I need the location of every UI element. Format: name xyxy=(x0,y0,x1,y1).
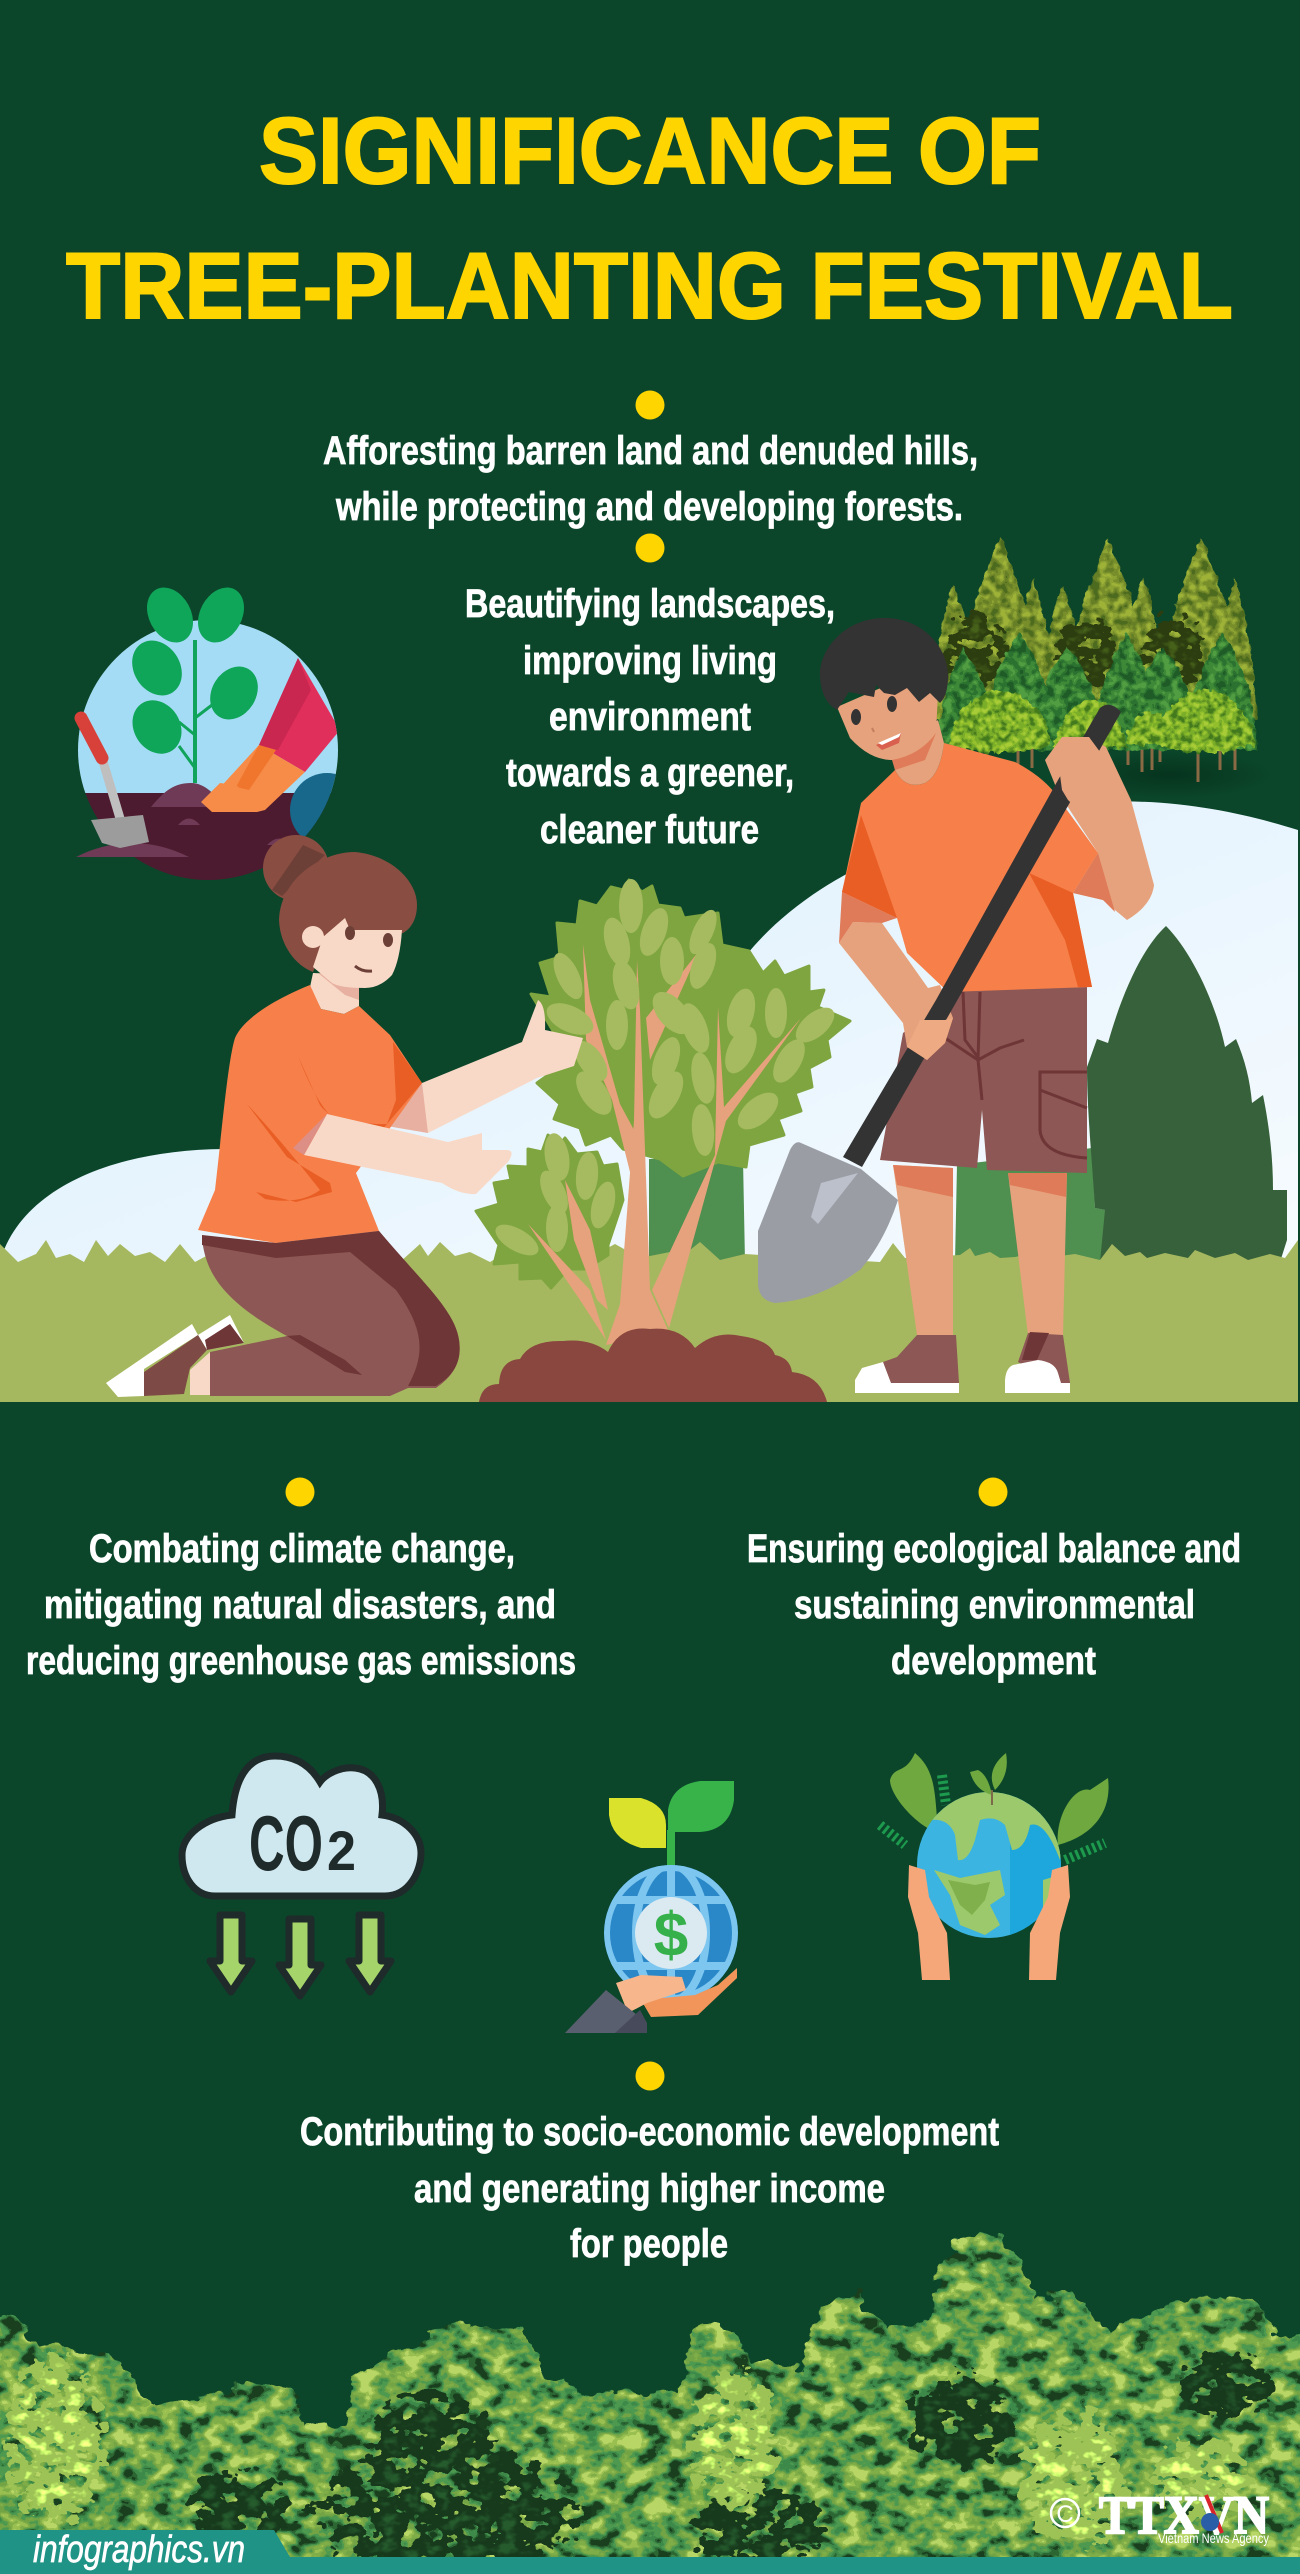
shoes xyxy=(883,1335,959,1383)
icon: CO2 cloud with down arrows: 2 xyxy=(327,1819,356,1882)
text block: beautifying landscapes: environment xyxy=(549,695,751,739)
legs xyxy=(893,1165,953,1335)
panel: background hills xyxy=(0,801,1298,1300)
icon: CO2 cloud with down arrows: CO xyxy=(249,1799,323,1887)
shovel handle xyxy=(843,705,1121,1167)
shorts xyxy=(880,985,1087,1173)
icon: globe with dollar and sprout: $ xyxy=(654,1901,688,1970)
text block: beautifying landscapes: Beautifying landscapes, xyxy=(465,582,835,626)
logo: TTXVN: TTXVN xyxy=(1099,2485,1269,2545)
text block: ensuring ecological balance: development xyxy=(891,1639,1096,1683)
right arm xyxy=(1045,737,1154,920)
text block: afforesting: Afforesting barren land and denuded hills, xyxy=(323,429,978,473)
pants xyxy=(202,1231,460,1396)
logo: TTXVN: Vietnam News Agency xyxy=(1158,2530,1269,2546)
shovel blade xyxy=(758,1142,898,1303)
logo: TTXVN: C xyxy=(1056,2501,1074,2528)
illustration: planted tree xyxy=(476,879,850,1402)
text block: afforesting xyxy=(323,390,978,529)
light leaves xyxy=(491,879,840,1262)
shirt xyxy=(198,985,422,1243)
illustration: boy with shovel xyxy=(758,618,1154,1393)
text block: combating climate change: reducing greenhouse gas emissions xyxy=(26,1639,576,1683)
bun and hair xyxy=(263,835,329,901)
panel: grass ground xyxy=(0,1240,1298,1402)
footer band with site name: infographics.vn xyxy=(33,2529,245,2571)
title: TREE-PLANTING FESTIVAL xyxy=(66,233,1233,338)
hands xyxy=(1058,737,1118,823)
text block: socio-economic development: for people xyxy=(570,2222,728,2266)
shirt xyxy=(842,743,1098,992)
icon: forest of trees xyxy=(933,538,1275,799)
leaf over woman's hand xyxy=(542,997,598,1041)
text block: ensuring ecological balance xyxy=(747,1478,1241,1683)
icon: CO2 cloud with down arrows xyxy=(182,1756,421,1996)
text block: beautifying landscapes: towards a greener, xyxy=(506,751,794,795)
icon: hand planting sapling xyxy=(74,588,338,880)
icon: globe with dollar and sprout xyxy=(565,1781,740,2033)
far arm xyxy=(387,1000,583,1133)
text block: beautifying landscapes: improving living xyxy=(523,639,777,683)
neck and head xyxy=(892,720,944,785)
face and neck xyxy=(310,973,359,1014)
text block: beautifying landscapes: cleaner future xyxy=(540,808,759,852)
illustration: kneeling woman xyxy=(106,835,583,1397)
text block: socio-economic development xyxy=(300,2062,999,2266)
illustration: foliage treeline xyxy=(0,2233,1300,2574)
trunk and branches xyxy=(528,944,801,1345)
soil mound xyxy=(479,1328,827,1402)
text block: combating climate change xyxy=(26,1478,576,1683)
text block: socio-economic development: and generating higher income xyxy=(414,2167,885,2211)
text block: ensuring ecological balance: sustaining environmental xyxy=(794,1583,1195,1627)
shoes xyxy=(198,1315,244,1350)
footer band with site name xyxy=(0,2529,1300,2574)
text block: beautifying landscapes xyxy=(465,534,835,852)
text block: afforesting: while protecting and developing forests. xyxy=(335,485,963,529)
text block: combating climate change: mitigating natural disasters, and xyxy=(44,1583,556,1627)
left arm xyxy=(839,922,953,1060)
text block: socio-economic development: Contributing to socio-economic development xyxy=(300,2110,999,2154)
bush foliage xyxy=(476,880,850,1288)
title: SIGNIFICANCE OF xyxy=(259,98,1041,203)
text block: combating climate change: Combating climate change, xyxy=(89,1527,515,1571)
near arm xyxy=(304,1114,512,1194)
icon: hands holding earth xyxy=(880,1753,1109,1980)
title xyxy=(66,98,1233,338)
